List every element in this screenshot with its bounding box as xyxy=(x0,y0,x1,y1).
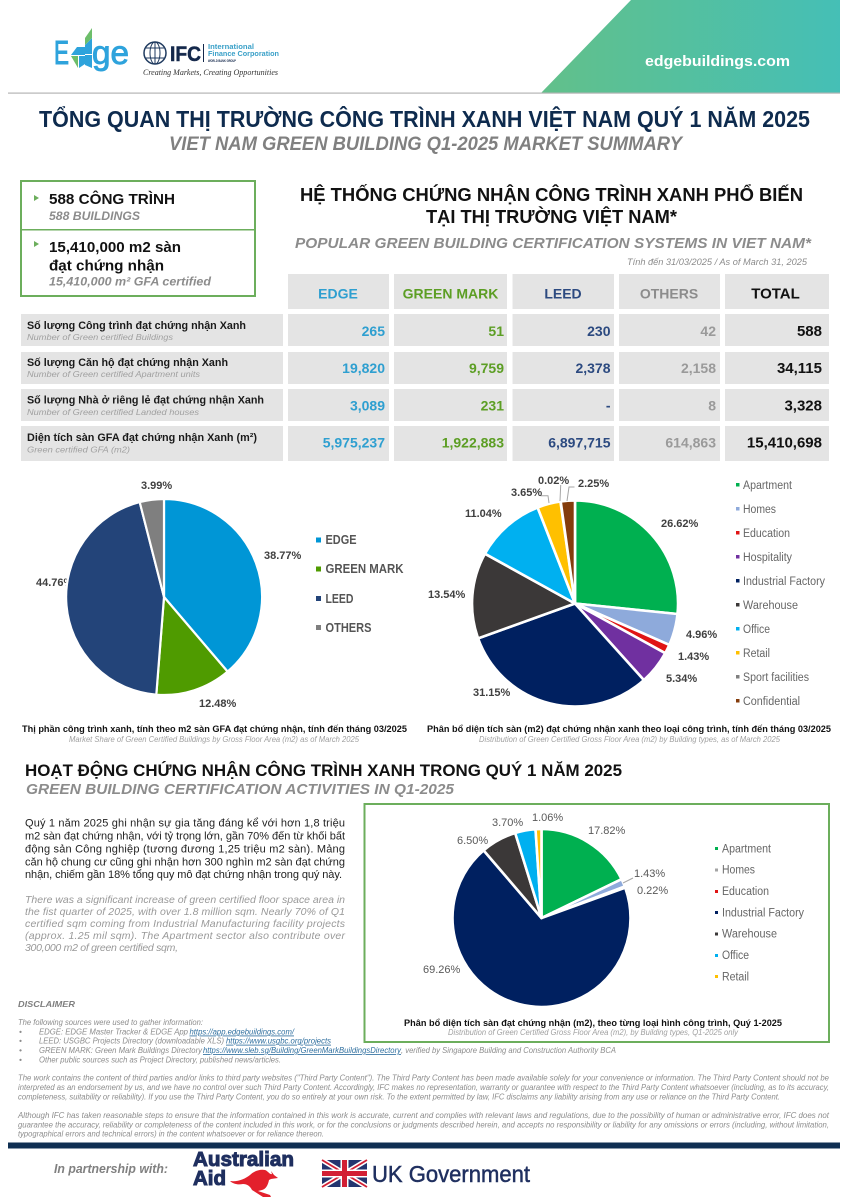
panel: key figures: 588 CÔNG TRÌNH xyxy=(49,190,175,208)
pie chart: market share by certification: 38.77% xyxy=(264,550,302,562)
table row: apartment units: 2,158 xyxy=(681,360,716,376)
text block: English summary: (approx. 1.25 mil sqm). The Apartment sector also contribute over xyxy=(25,930,346,942)
text block: Vietnamese summary: nhận, chiếm gần 18% tổng quy mô đạt chứng nhận trong quý này. xyxy=(25,869,342,881)
text block: Vietnamese summary xyxy=(25,817,345,881)
disclaimer xyxy=(17,999,830,1139)
pie chart: market share by certification xyxy=(36,480,302,710)
text block: English summary xyxy=(25,894,346,954)
disclaimer: completeness, suitability or reliability). If you use the Third Party Content, you do so entirely at your own risk. To the extent permitted by law, IFC disclaims any liability arising from any use or reliance on the Third Party Content. xyxy=(18,1091,780,1101)
caption: building types xyxy=(427,724,832,744)
legend: certification systems: EDGE xyxy=(326,533,356,547)
disclaimer: , verified by Singapore Building and Construction Authority BCA xyxy=(401,1045,616,1055)
table row: apartment units: 2,378 xyxy=(575,360,611,376)
disclaimer: DISCLAIMER xyxy=(18,999,76,1009)
heading: certification systems: TẠI THỊ TRƯỜNG VIỆT NAM* xyxy=(426,206,677,227)
text block: Vietnamese summary: m2 sàn đạt chứng nhận, với tỷ trọng lớn, gần 70% đến từ khối bất xyxy=(25,830,345,842)
legend: building types: Sport facilities xyxy=(743,672,809,684)
pie chart: Q1 GFA by building type xyxy=(423,812,668,1007)
pie chart: Q1 GFA by building type: 69.26% xyxy=(423,964,461,976)
legend: certification systems: GREEN MARK xyxy=(326,562,404,576)
table row: buildings: 588 xyxy=(797,323,822,340)
header banner: edgebuildings.com xyxy=(645,53,790,70)
legend: Q1 building types: Retail xyxy=(722,971,749,983)
heading: Q1 activities xyxy=(25,761,622,798)
legend: building types: Industrial Factory xyxy=(743,576,825,588)
pie chart: GFA by building type: 31.15% xyxy=(473,687,511,699)
pie chart: Q1 GFA by building type: 1.43% xyxy=(634,868,665,880)
pie chart: market share by certification: 44.76% xyxy=(36,577,74,589)
pie chart: GFA by building type: 1.43% xyxy=(678,651,709,663)
legend: building types: Apartment xyxy=(743,480,793,492)
table row: landed houses: - xyxy=(606,398,611,414)
legend: certification systems xyxy=(316,533,404,635)
panel: key figures: 15,410,000 m² GFA certified xyxy=(49,274,212,288)
legend: building types: Homes xyxy=(743,504,776,516)
text block: English summary: There was a significant increase of green certified floor space area in xyxy=(25,894,345,906)
table row: apartment units: 9,759 xyxy=(469,360,504,376)
disclaimer: Other public sources such as Project Directory, published news/articles. xyxy=(39,1055,281,1065)
table row: GFA xyxy=(27,432,822,454)
table row: landed houses: 231 xyxy=(481,398,504,414)
logo: IFC: WORLD BANK GROUP xyxy=(208,58,236,63)
legend: certification systems: LEED xyxy=(326,592,354,606)
title xyxy=(39,105,810,155)
heading: certification systems: HỆ THỐNG CHỨNG NHẬN CÔNG TRÌNH XANH PHỔ BIẾN xyxy=(300,184,803,205)
text block: Vietnamese summary: động sản Công nghiệp (tương đương 1,25 triệu m2 sàn). Mảng xyxy=(25,843,345,855)
legend: building types: Hospitality xyxy=(743,552,792,564)
title: TỔNG QUAN THỊ TRƯỜNG CÔNG TRÌNH XANH VIỆT NAM QUÝ 1 NĂM 2025 xyxy=(39,105,810,132)
logo: Australian Aid xyxy=(193,1149,294,1197)
logo: IFC: IFC xyxy=(170,43,201,66)
panel: key figures: 588 BUILDINGS xyxy=(49,209,140,223)
footer bar xyxy=(8,1142,840,1148)
legend: Q1 building types: Office xyxy=(722,950,749,962)
logo: IFC: International xyxy=(208,44,254,51)
legend: building types: Retail xyxy=(743,648,770,660)
table row: buildings: 230 xyxy=(587,323,611,339)
disclaimer: • xyxy=(19,1036,22,1046)
text block: English summary: 300,000 m2 of green certified sqm, xyxy=(25,942,178,954)
disclaimer: • xyxy=(19,1026,22,1036)
pie chart: Q1 GFA by building type: 3.70% xyxy=(492,817,523,829)
title: VIET NAM GREEN BUILDING Q1-2025 MARKET SUMMARY xyxy=(169,134,684,155)
panel: key figures: 15,410,000 m2 sàn xyxy=(49,239,181,256)
header banner xyxy=(8,0,840,94)
legend: building types: Warehouse xyxy=(743,600,798,612)
table row: buildings: 265 xyxy=(362,323,385,339)
panel: key figures: đạt chứng nhận xyxy=(49,258,164,274)
logo: UK Government xyxy=(322,1160,530,1187)
heading: certification systems: POPULAR GREEN BUILDING CERTIFICATION SYSTEMS IN VIET NAM* xyxy=(295,236,812,252)
logo: UK Government: UK Government xyxy=(372,1161,530,1187)
table row: apartment units xyxy=(27,357,822,379)
legend: Q1 building types: Education xyxy=(722,886,769,898)
table row: GFA: 15,410,698 xyxy=(747,434,822,452)
legend: building types: Education xyxy=(743,528,790,540)
logo: IFC: Creating Markets, Creating Opportunities xyxy=(143,68,278,77)
partnership label: In partnership with: xyxy=(54,1161,168,1176)
caption: building types: Phân bổ diện tích sàn (m2) đạt chứng nhận xanh theo loại công trình, tính đến tháng 03/2025 xyxy=(427,724,832,735)
caption: Q1 chart: Distribution of Green Certified Gross Floor Area (m2), by Building types, Q1-2025 only xyxy=(448,1028,739,1037)
caption: Q1 chart xyxy=(404,1018,783,1037)
disclaimer: https://www.sleb.sg/Building/GreenMarkBuildingsDirectory xyxy=(203,1045,402,1055)
pie chart: GFA by building type: 3.65% xyxy=(511,487,542,499)
legend: Q1 building types xyxy=(715,843,804,983)
pie chart: GFA by building type: 13.54% xyxy=(428,589,466,601)
pie chart: GFA by building type: 11.04% xyxy=(465,508,502,520)
disclaimer: LEED: USGBC Projects Directory (downloadable XLS) xyxy=(39,1036,224,1046)
table row: GFA: Diện tích sàn GFA đạt chứng nhận Xanh (m²) xyxy=(27,432,257,444)
pie chart: Q1 GFA by building type: 1.06% xyxy=(532,812,563,824)
caption: market share xyxy=(22,724,408,744)
legend: building types: Office xyxy=(743,624,770,636)
pie chart: market share by certification: 3.99% xyxy=(141,480,172,492)
table header row: TOTAL xyxy=(751,286,800,302)
pie chart: GFA by building type xyxy=(428,475,717,707)
disclaimer: Although IFC has taken reasonable steps to ensure that the information contained in this work is accurate, current and complies with relevant laws and regulations, due to the possibility of human or administrative error, IFC does not xyxy=(17,1110,830,1120)
table header row xyxy=(318,286,800,302)
legend: building types xyxy=(736,480,825,708)
legend: certification systems: OTHERS xyxy=(326,621,372,635)
table row: buildings xyxy=(27,320,822,342)
heading: Q1 activities: GREEN BUILDING CERTIFICATION ACTIVITIES IN Q1-2025 xyxy=(26,782,455,798)
table header row: EDGE xyxy=(318,286,358,302)
table row: GFA: 5,975,237 xyxy=(323,434,385,450)
disclaimer: The following sources were used to gather information: xyxy=(18,1017,203,1027)
legend: building types: Confidential xyxy=(743,696,800,708)
table row: buildings: Number of Green certified Buildings xyxy=(27,332,174,342)
caption: market share: Market Share of Green Certified Buildings by Gross Floor Area (m2) as of March 2025 xyxy=(69,735,360,744)
table row: landed houses: Số lượng Nhà ở riêng lẻ đạt chứng nhận Xanh xyxy=(27,394,264,406)
text block: Vietnamese summary: Quý 1 năm 2025 ghi nhận sự gia tăng đáng kể với hơn 1,8 triệu xyxy=(25,817,345,829)
panel: Q1 building type chart xyxy=(364,804,829,1042)
table row: landed houses xyxy=(27,394,822,417)
pie chart: Q1 GFA by building type: 0.22% xyxy=(637,885,668,897)
table row: landed houses: 8 xyxy=(708,398,716,414)
table: certification statistics xyxy=(21,274,829,461)
caption: Q1 chart: Phân bổ diện tích sàn đạt chứng nhận (m2), theo từng loại hình công trình, Quý 1-2025 xyxy=(404,1018,783,1029)
disclaimer: • xyxy=(19,1055,22,1065)
table row: GFA: Green certified GFA (m2) xyxy=(27,444,130,454)
legend: Q1 building types: Warehouse xyxy=(722,929,777,941)
caption: market share: Thị phần công trình xanh, tính theo m2 sàn GFA đạt chứng nhận, tính đến tháng 03/2025 xyxy=(22,724,408,735)
logo: Australian Aid: Aid xyxy=(193,1168,226,1190)
text block: English summary: certified sqm coming from Industrial Manufacturing facility projects xyxy=(25,918,346,930)
table header row: GREEN MARK xyxy=(403,286,498,302)
pie chart: Q1 GFA by building type: 17.82% xyxy=(588,825,626,837)
table row: apartment units: Số lượng Căn hộ đạt chứng nhận Xanh xyxy=(27,357,228,369)
heading: Q1 activities: HOẠT ĐỘNG CHỨNG NHẬN CÔNG TRÌNH XANH TRONG QUÝ 1 NĂM 2025 xyxy=(25,761,622,780)
disclaimer: • xyxy=(19,1045,22,1055)
table row: GFA: 6,897,715 xyxy=(548,434,611,450)
table header row: OTHERS xyxy=(640,286,698,302)
logo: Australian Aid: Australian xyxy=(193,1149,294,1171)
legend: Q1 building types: Apartment xyxy=(722,843,772,855)
legend: Q1 building types: Homes xyxy=(722,865,755,877)
table row: buildings: 42 xyxy=(700,323,716,339)
table row: landed houses: Number of Green certified Landed houses xyxy=(27,407,200,417)
pie chart: GFA by building type: 5.34% xyxy=(666,673,697,685)
caption: building types: Distribution of Green Certified Gross Floor Area (m2) by Building types, as of March 2025 xyxy=(479,735,781,744)
pie chart: Q1 GFA by building type: 6.50% xyxy=(457,835,488,847)
logo: EDGE: ge xyxy=(92,34,129,71)
table row: apartment units: 19,820 xyxy=(342,360,385,376)
table row: GFA: 1,922,883 xyxy=(442,434,504,450)
table row: apartment units: 34,115 xyxy=(777,360,822,377)
disclaimer: https://www.usgbc.org/projects xyxy=(226,1036,331,1046)
disclaimer: https://app.edgebuildings.com/ xyxy=(190,1026,296,1036)
table row: buildings: Số lượng Công trình đạt chứng nhận Xanh xyxy=(27,320,246,332)
pie chart: GFA by building type: 2.25% xyxy=(578,478,609,490)
disclaimer: typographical errors and technical errors) in the content whatsoever or for reliance thereon. xyxy=(18,1129,324,1139)
table row: landed houses: 3,328 xyxy=(784,398,822,414)
heading: certification systems xyxy=(295,184,812,267)
pie chart: GFA by building type: 0.02% xyxy=(538,475,569,487)
table row: landed houses: 3,089 xyxy=(350,398,385,414)
logo: IFC xyxy=(143,42,279,77)
panel: key figures xyxy=(21,181,255,296)
text block: Vietnamese summary: căn hộ chung cư cũng ghi nhận hơn 300 nghìn m2 sàn đạt chứng xyxy=(25,856,345,868)
legend: Q1 building types: Industrial Factory xyxy=(722,907,804,919)
disclaimer: EDGE: EDGE Master Tracker & EDGE App xyxy=(39,1026,188,1036)
heading: certification systems: Tính đến 31/03/2025 / As of March 31, 2025 xyxy=(627,257,808,267)
logo: EDGE: E xyxy=(54,34,69,71)
disclaimer: GREEN MARK: Green Mark Buildings Directory xyxy=(39,1045,203,1055)
pie chart: GFA by building type: 4.96% xyxy=(686,629,717,641)
table header row: LEED xyxy=(544,286,582,302)
text block: English summary: the fist quarter of 2025, with over 1.8 million sqm. Nearly 70% of Q1 xyxy=(25,906,345,918)
table row: apartment units: Number of Green certified Apartment units xyxy=(27,369,201,379)
logo: EDGE xyxy=(54,28,129,71)
logo: IFC: Finance Corporation xyxy=(208,51,279,58)
pie chart: GFA by building type: 26.62% xyxy=(661,518,699,530)
table row: GFA: 614,863 xyxy=(665,434,716,450)
table row: buildings: 51 xyxy=(488,323,504,339)
pie chart: market share by certification: 12.48% xyxy=(199,698,237,710)
